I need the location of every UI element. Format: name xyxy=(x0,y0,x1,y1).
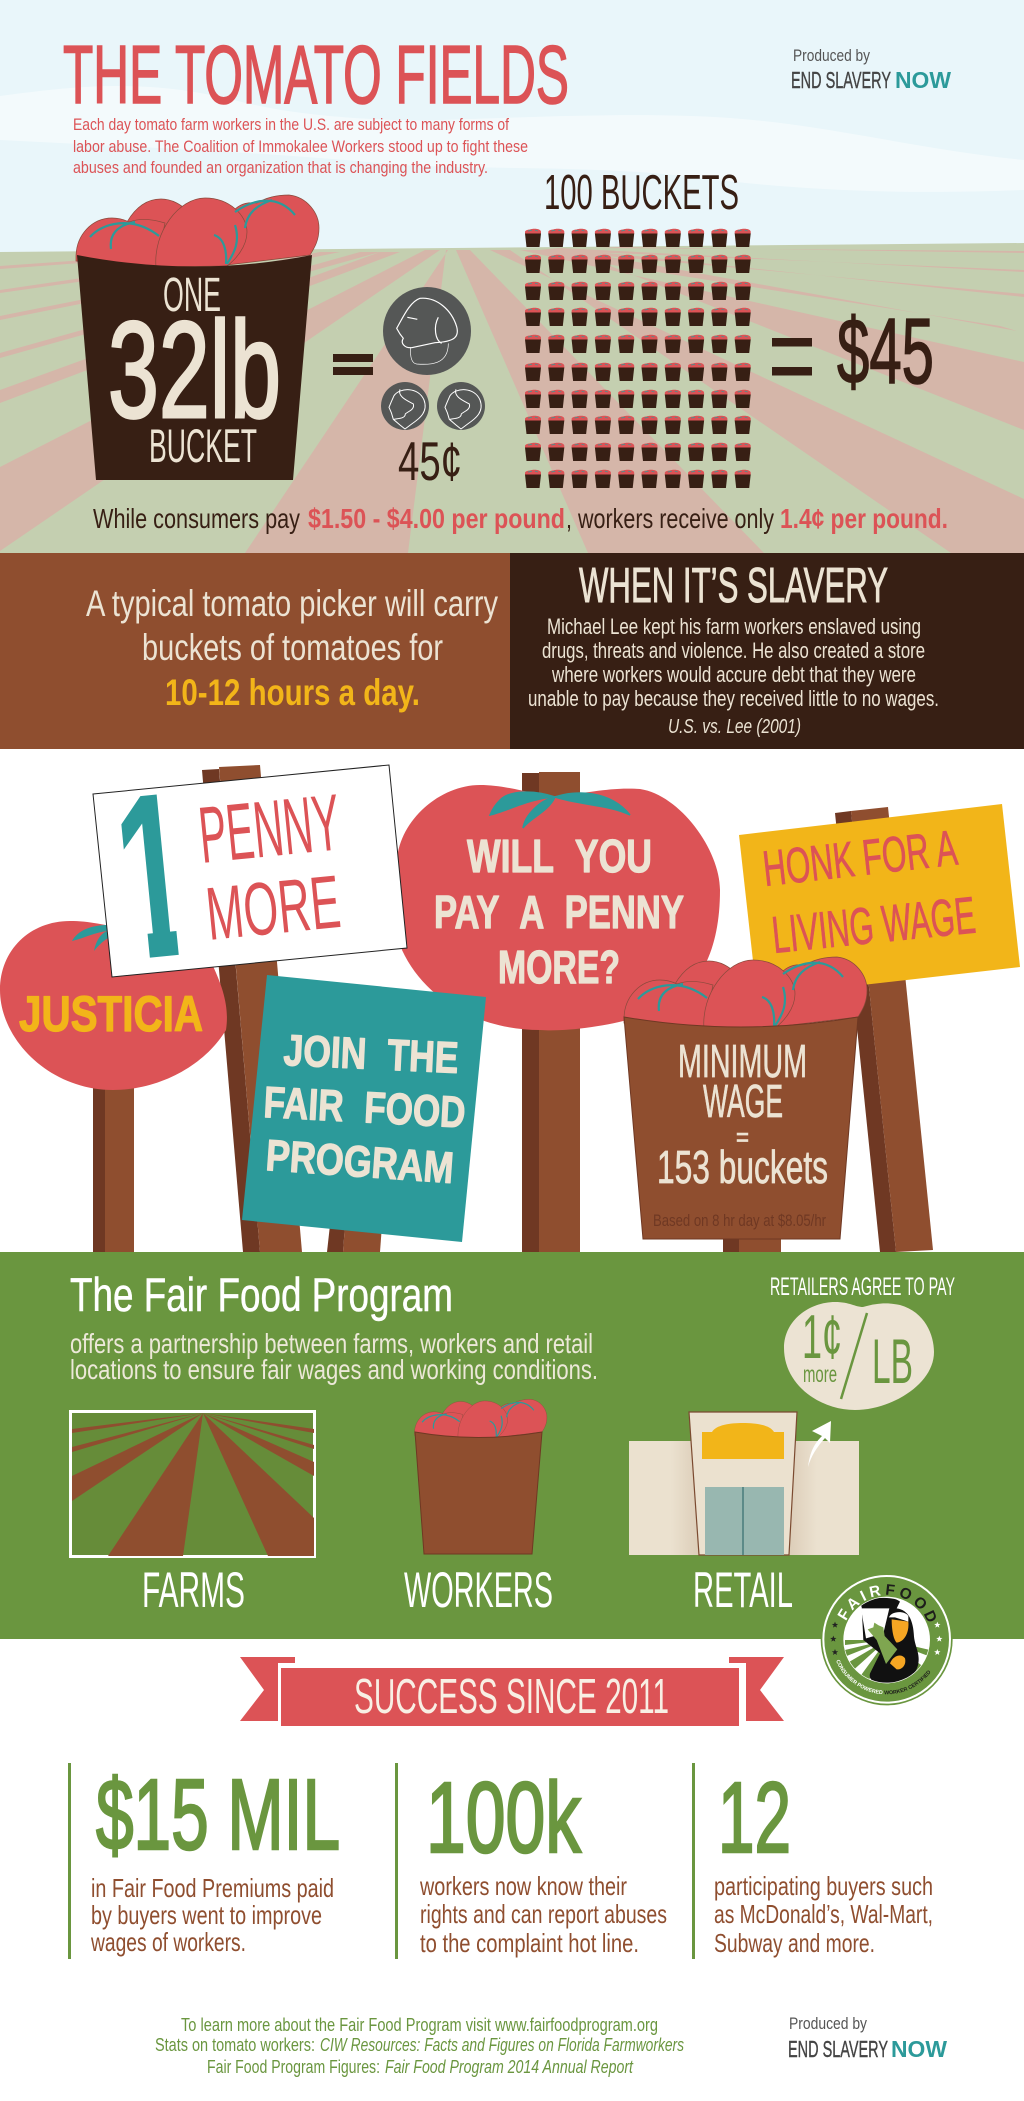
equals 45 dollars xyxy=(772,299,934,403)
producer credit: END SLAVERY xyxy=(791,67,891,93)
large bucket: 32lb xyxy=(108,294,281,447)
equals 45 dollars: $45 xyxy=(837,299,934,403)
sign: minimum wage bucket: = xyxy=(736,1122,749,1152)
panel: picker hours xyxy=(0,553,510,749)
panel: picker hours: 10-12 hours a day. xyxy=(165,672,420,713)
sign: minimum wage bucket: MINIMUM xyxy=(678,1035,807,1087)
sign: 1 penny more: PENNY xyxy=(195,777,344,880)
producer credit xyxy=(791,46,951,93)
footer producer credit: END SLAVERY xyxy=(788,2036,888,2062)
sign: justicia tomato xyxy=(0,921,227,1090)
intro text xyxy=(73,115,528,177)
banner: success since 2011: SUCCESS SINCE 2011 xyxy=(354,1670,669,1724)
sign: minimum wage bucket: Based on 8 hr day at $8.05/hr xyxy=(653,1211,826,1230)
bucket grid: 100 buckets xyxy=(525,229,751,488)
stat: 15 million: $15 MIL xyxy=(96,1759,340,1871)
sign: will you pay a penny more tomato xyxy=(397,785,720,1030)
sign post: justicia xyxy=(93,1080,134,1252)
sign: join the fair food program: JOIN THE xyxy=(283,1026,460,1083)
price comparison sentence: $1.50 - $4.00 per pound xyxy=(308,503,565,534)
panel: when it's slavery: where workers would accure debt that they were xyxy=(551,662,916,687)
large bucket xyxy=(76,195,319,480)
icon: fair food badge: CONSUMER POWERED WORKER CERTIFIED xyxy=(836,1660,930,1694)
sign: will you pay a penny more tomato: MORE? xyxy=(498,941,620,993)
callout: retailers agree to pay: 1¢ xyxy=(802,1303,842,1372)
icon: fair food badge: FAIRFOOD xyxy=(837,1584,936,1622)
program labels: FARMS xyxy=(142,1562,245,1618)
stat: 100k: to the complaint hot line. xyxy=(420,1928,639,1958)
stat: 15 million: in Fair Food Premiums paid xyxy=(91,1873,334,1903)
price comparison sentence xyxy=(93,503,948,534)
equals sign xyxy=(333,354,373,375)
price comparison sentence: While consumers pay xyxy=(93,503,300,534)
panel: when it's slavery: U.S. vs. Lee (2001) xyxy=(668,716,801,738)
callout: retailers agree to pay: LB xyxy=(872,1327,913,1397)
stat: 15 million xyxy=(68,1759,340,1959)
footer sources: Stats on tomato workers: xyxy=(155,2035,315,2055)
program description: locations to ensure fair wages and working conditions. xyxy=(70,1354,598,1385)
program heading: The Fair Food Program xyxy=(70,1268,453,1321)
footer sources: CIW Resources: Facts and Figures on Florida Farmworkers xyxy=(320,2035,684,2055)
intro text: Each day tomato farm workers in the U.S. are subject to many forms of xyxy=(73,115,509,134)
sign: minimum wage bucket: 153 buckets xyxy=(657,1141,828,1193)
footer producer credit: Produced by xyxy=(789,2014,867,2033)
banner: success since 2011 xyxy=(240,1657,784,1728)
arrow: retail to price xyxy=(808,1421,831,1467)
panel: when it's slavery: Michael Lee kept his farm workers enslaved using xyxy=(547,614,921,639)
program labels xyxy=(142,1562,793,1618)
stat: 100k: rights and can report abuses xyxy=(420,1899,667,1929)
footer producer credit xyxy=(788,2014,947,2062)
stat: 100k: workers now know their xyxy=(419,1871,627,1901)
sign: will you pay a penny more tomato: WILL YOU xyxy=(467,830,652,882)
stat: 100k xyxy=(395,1762,667,1959)
producer credit: NOW xyxy=(895,67,951,93)
icon: fair food badge xyxy=(820,1575,953,1706)
panel: fair food program xyxy=(0,1252,1024,1639)
100 buckets heading: 100 BUCKETS xyxy=(544,166,739,220)
stat: 12 buyers: participating buyers such xyxy=(714,1871,933,1901)
panel: picker hours: A typical tomato picker will carry xyxy=(86,583,498,624)
stat: 12 buyers: Subway and more. xyxy=(714,1928,875,1958)
panel: picker hours: buckets of tomatoes for xyxy=(142,627,443,668)
sign: join the fair food program: PROGRAM xyxy=(264,1131,455,1193)
footer sources: Fair Food Program Figures: xyxy=(207,2057,380,2077)
sign post: honk xyxy=(835,807,933,1252)
program description xyxy=(70,1328,598,1385)
footer sources: Fair Food Program 2014 Annual Report xyxy=(385,2057,634,2077)
callout: retailers agree to pay xyxy=(770,1273,955,1410)
sign: 1 penny more: 1 xyxy=(105,741,201,1010)
sign post: minimum wage xyxy=(723,1235,781,1252)
sky background xyxy=(0,0,1024,260)
footer sources: To learn more about the Fair Food Program visit www.fairfoodprogram.org xyxy=(181,2015,658,2035)
sign: will you pay a penny more tomato: PAY A PENNY xyxy=(434,886,684,938)
icon: retail store xyxy=(629,1412,859,1555)
sign: minimum wage bucket: WAGE xyxy=(703,1075,783,1127)
sign: 1 penny more xyxy=(92,764,408,978)
callout: retailers agree to pay: more xyxy=(803,1361,837,1387)
sign: 1 penny more: MORE xyxy=(202,859,344,956)
stat: 12 buyers: 12 xyxy=(718,1762,791,1874)
program labels: WORKERS xyxy=(404,1562,553,1618)
price comparison sentence: 1.4¢ per pound. xyxy=(780,503,948,534)
title: THE TOMATO FIELDS xyxy=(63,28,569,121)
stat: 100k: 100k xyxy=(426,1762,582,1874)
sign: join the fair food program: FAIR FOOD xyxy=(262,1078,467,1138)
large bucket: ONE xyxy=(163,269,221,322)
stat: 15 million: by buyers went to improve xyxy=(91,1900,322,1930)
sign: justicia tomato: JUSTICIA xyxy=(19,986,203,1042)
footer sources xyxy=(155,2015,684,2077)
tomato field xyxy=(0,243,1024,553)
icon: worker bucket xyxy=(414,1399,547,1554)
stat: 15 million: wages of workers. xyxy=(90,1927,246,1957)
45 cents label: 45¢ xyxy=(398,430,462,492)
sign post: center tomato xyxy=(522,772,580,1252)
stat: 12 buyers xyxy=(692,1762,933,1959)
icon: dime coins xyxy=(381,382,485,430)
icon: quarter coin xyxy=(383,287,471,375)
sign post: rear xyxy=(327,1225,382,1252)
sign: join the fair food program xyxy=(242,975,486,1242)
panel: when it's slavery xyxy=(510,553,1024,749)
footer producer credit: NOW xyxy=(891,2036,947,2062)
producer credit: Produced by xyxy=(793,46,870,65)
icon: farm field xyxy=(70,1412,314,1556)
intro text: abuses and founded an organization that is changing the industry. xyxy=(73,158,488,177)
large bucket: BUCKET xyxy=(149,419,257,472)
intro text: labor abuse. The Coalition of Immokalee Workers stood up to fight these xyxy=(73,137,528,156)
program description: offers a partnership between farms, workers and retail xyxy=(70,1328,593,1359)
sign: honk for a living wage xyxy=(739,804,1020,997)
stat: 12 buyers: as McDonald’s, Wal-Mart, xyxy=(714,1899,933,1929)
price comparison sentence: , workers receive only xyxy=(566,503,774,534)
sign post: 1 penny xyxy=(202,765,302,1252)
program labels: RETAIL xyxy=(693,1562,793,1618)
sign: minimum wage bucket xyxy=(624,957,867,1239)
